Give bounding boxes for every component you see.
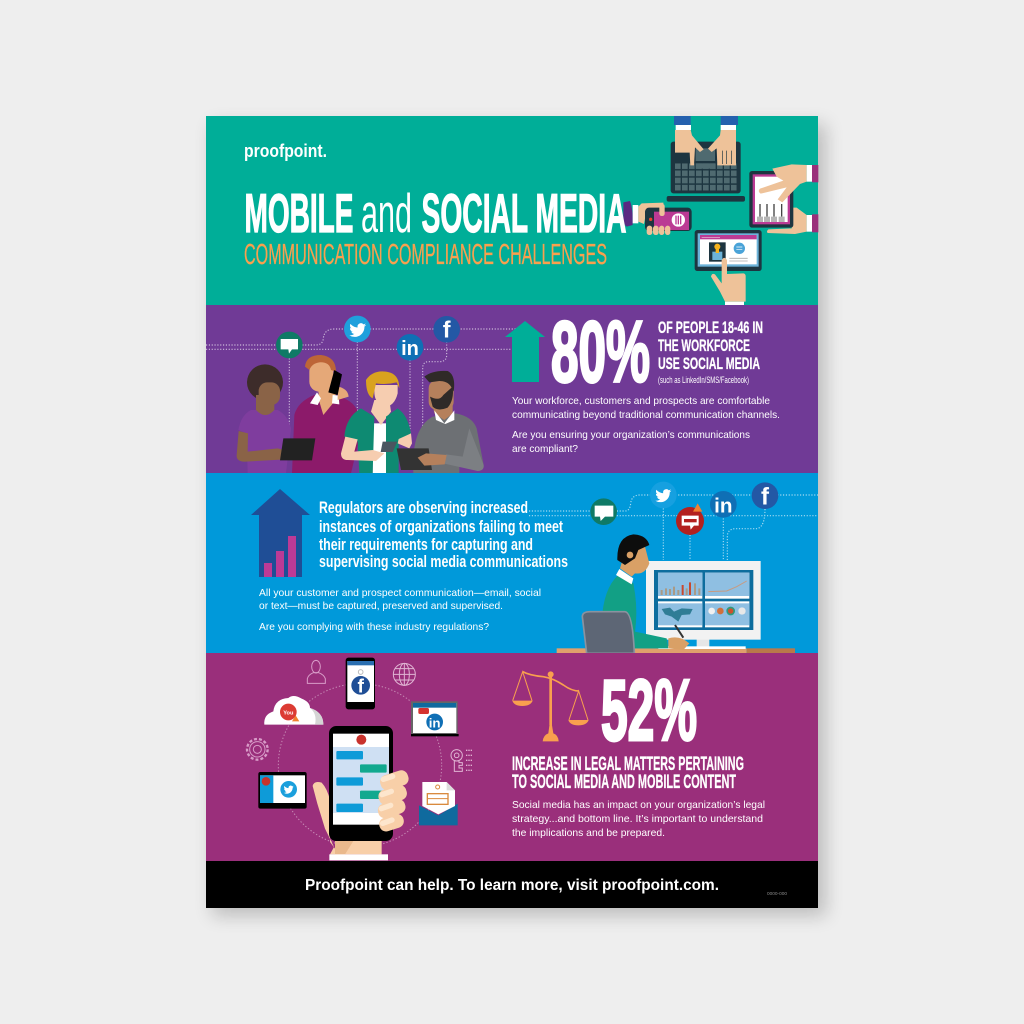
icon: chat — [590, 498, 617, 525]
monitor — [646, 561, 761, 649]
stat caption — [658, 318, 763, 386]
arrow up — [505, 321, 545, 382]
icon: alert — [676, 503, 704, 535]
person: man in grey sweater — [397, 371, 484, 473]
body text: are compliant? — [512, 443, 578, 455]
person at desk — [582, 534, 689, 653]
body text: the implications and be prepared. — [512, 827, 665, 839]
icon: twitter — [650, 482, 677, 508]
desk — [557, 648, 795, 653]
icon: facebook — [433, 316, 460, 343]
icon: linkedin — [397, 334, 423, 361]
icon: facebook — [752, 482, 778, 510]
connector lines — [206, 329, 516, 448]
stat: 80%: 80% — [551, 304, 650, 400]
icon: person outline — [307, 660, 325, 683]
main phone — [329, 726, 393, 841]
body text: Social media has an impact on your organization’s legal — [512, 799, 765, 811]
title: and — [361, 182, 412, 244]
panel: 80 percent social media — [206, 304, 818, 473]
connecting ring — [278, 684, 442, 847]
body text: strategy...and bottom line. It’s important to understand — [512, 813, 763, 825]
icon: facebook: f — [761, 483, 770, 510]
tablet with pointing hand — [695, 230, 762, 305]
icon: globe — [393, 663, 415, 685]
icon: twitter — [344, 316, 371, 342]
person: woman in green — [341, 371, 412, 473]
envelope — [419, 782, 458, 825]
heading: supervising social media communications — [319, 552, 568, 571]
title: MOBILE — [244, 182, 354, 244]
icon: arrow with bars — [251, 489, 310, 577]
subtitle: COMMUNICATION COMPLIANCE CHALLENGES — [244, 239, 607, 271]
heading: INCREASE IN LEGAL MATTERS PERTAINING — [512, 754, 744, 775]
phone: facebook: f — [357, 676, 364, 697]
stat: 52%: 52% — [601, 663, 697, 759]
hand palm — [313, 782, 335, 854]
icon: scales of justice — [512, 671, 589, 741]
icon: linkedin — [710, 491, 737, 518]
panel: header — [206, 116, 818, 305]
heading — [512, 754, 744, 793]
laptop — [667, 116, 745, 202]
title — [244, 182, 626, 244]
panel: regulators — [206, 473, 818, 653]
body text — [512, 799, 765, 839]
body text — [512, 395, 780, 455]
window: linkedin — [411, 701, 459, 736]
hand fingers and cuff — [329, 769, 410, 860]
icon: gear — [247, 739, 268, 760]
heading: their requirements for capturing and — [319, 535, 533, 554]
stat caption: THE WORKFORCE — [658, 336, 750, 355]
panel: legal matters 52 percent — [206, 653, 818, 861]
stat caption: (such as LinkedIn/SMS/Facebook) — [658, 375, 749, 386]
poster drop shadow — [212, 124, 826, 916]
heading — [319, 498, 568, 571]
icon: key and code — [451, 750, 472, 771]
heading: instances of organizations failing to meet — [319, 517, 563, 536]
heading: Regulators are observing increased — [319, 498, 528, 517]
illustration: phone and connected apps — [247, 658, 472, 860]
tablet: first woman — [280, 438, 315, 460]
icon: chat — [276, 332, 303, 358]
cloud: youtube — [264, 696, 323, 725]
cloud: youtube: You — [283, 710, 294, 716]
illustration: workforce with social icons — [206, 316, 516, 473]
body text — [259, 587, 541, 633]
heading: TO SOCIAL MEDIA AND MOBILE CONTENT — [512, 772, 736, 793]
call to action: Proofpoint can help. To learn more, visit proofpoint.com. — [305, 877, 719, 894]
document code: 0000-000 — [767, 891, 788, 896]
body text: Are you complying with these industry regulations? — [259, 621, 489, 633]
person: woman in purple — [237, 364, 291, 473]
body text: All your customer and prospect communication—email, social — [259, 587, 541, 599]
stat caption: OF PEOPLE 18-46 IN — [658, 318, 763, 337]
icon: linkedin: in — [714, 494, 733, 517]
tablet with two hands — [749, 164, 818, 234]
footer bar — [206, 861, 818, 908]
phone: facebook — [346, 658, 375, 709]
stat caption: USE SOCIAL MEDIA — [658, 354, 760, 373]
title: SOCIAL MEDIA — [422, 182, 626, 244]
window: linkedin: in — [429, 715, 441, 730]
illustration: analyst at monitor — [529, 482, 818, 653]
tablet: twitter — [258, 772, 307, 809]
icon: linkedin: in — [401, 338, 419, 360]
body text: Are you ensuring your organization’s communications — [512, 429, 750, 441]
connector lines — [529, 495, 818, 560]
person: man on phone — [292, 355, 359, 473]
body text: or text—must be captured, preserved and supervised. — [259, 600, 503, 612]
body text: Your workforce, customers and prospects are comfortable — [512, 395, 770, 407]
body text: communicating beyond traditional communication channels. — [512, 409, 780, 421]
logo: proofpoint. — [244, 141, 327, 161]
illustration: hands on devices — [623, 116, 818, 305]
phone in hand — [623, 201, 692, 235]
icon: facebook: f — [443, 317, 451, 343]
